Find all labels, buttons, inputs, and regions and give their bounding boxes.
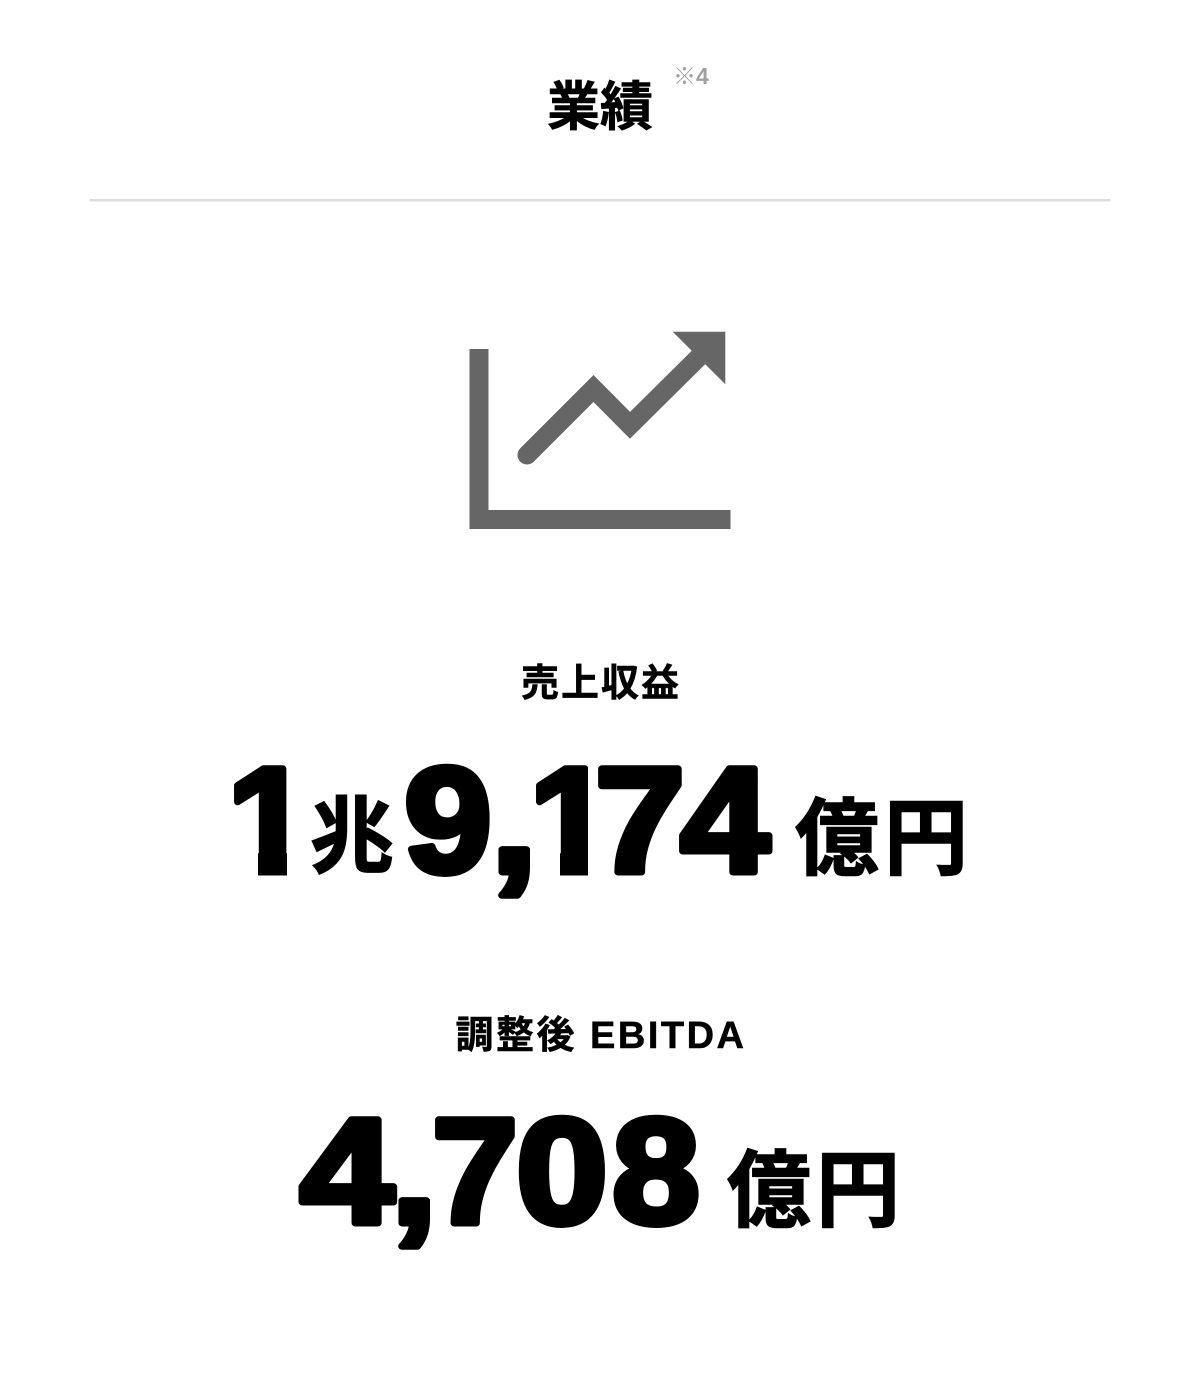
- title: 業績: [547, 78, 653, 137]
- value: revenue: 7: [595, 737, 685, 905]
- value: revenue: 1: [529, 736, 613, 904]
- title: [547, 63, 709, 137]
- value: adjusted EBITDA: 0: [516, 1088, 608, 1255]
- footnote marker: ※4: [673, 63, 709, 89]
- icon: rising line chart: [470, 332, 730, 529]
- value: revenue: ,: [491, 736, 537, 904]
- value: adjusted EBITDA: 円: [816, 1124, 900, 1245]
- value: adjusted EBITDA: 4: [300, 1087, 394, 1255]
- value: revenue: 円: [884, 772, 968, 893]
- value: revenue: 4: [680, 736, 770, 904]
- value: revenue: 9: [404, 736, 492, 904]
- label: adjusted EBITDA: 調整後 EBITDA: [455, 1015, 747, 1057]
- value: adjusted EBITDA: 億: [727, 1124, 811, 1245]
- value: adjusted EBITDA: [300, 1087, 900, 1256]
- label: revenue: 売上収益: [521, 663, 681, 705]
- value: adjusted EBITDA: ,: [391, 1087, 437, 1255]
- value: revenue: 億: [795, 772, 879, 893]
- value: adjusted EBITDA: 7: [432, 1088, 518, 1256]
- value: revenue: 兆: [310, 770, 394, 891]
- value: revenue: 1: [227, 736, 311, 904]
- value: adjusted EBITDA: 8: [612, 1087, 700, 1255]
- value: revenue: [234, 764, 963, 899]
